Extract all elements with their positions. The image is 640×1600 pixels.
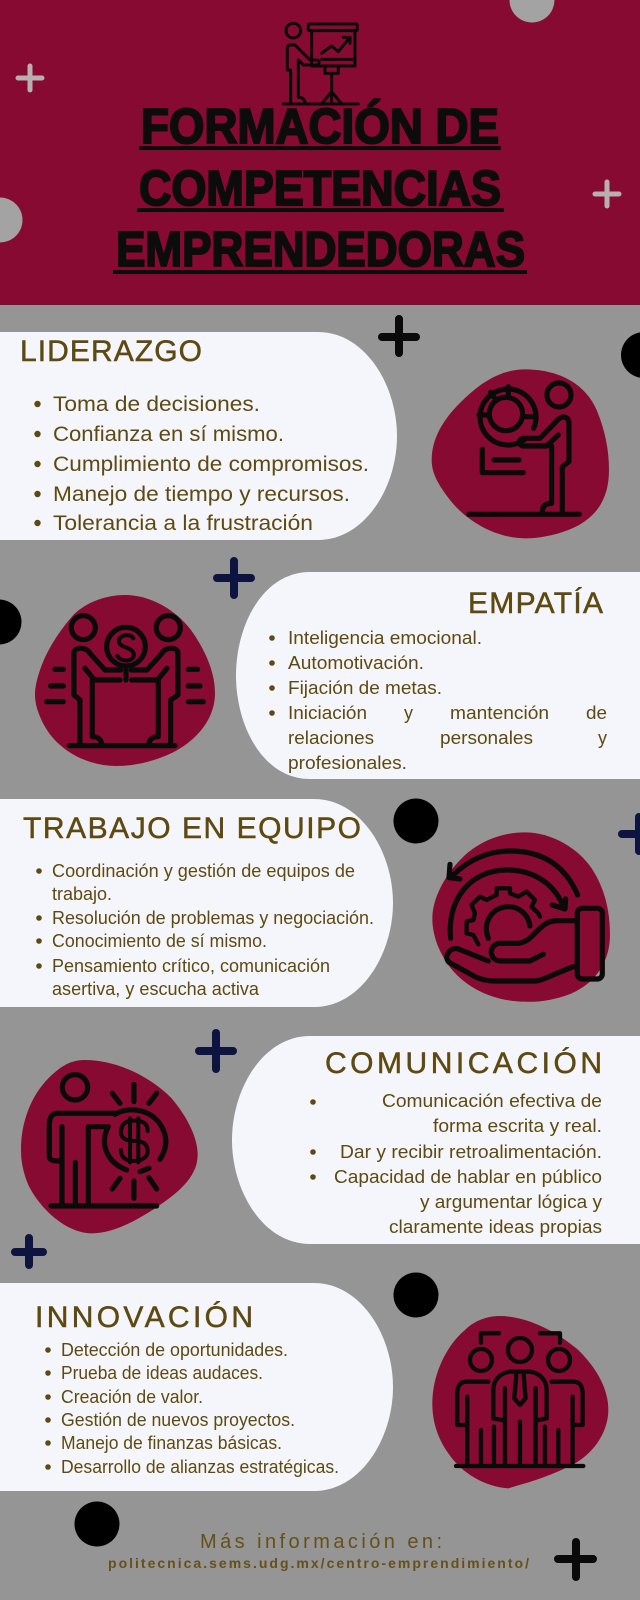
footer [108, 1531, 529, 1571]
list: comunicacion: y argumentar lógica y [420, 1192, 602, 1212]
list: empatia: Automotivación. [288, 653, 424, 673]
list: trabajo en equipo: Pensamiento crítico, comunicación [52, 956, 330, 976]
list: liderazgo: Tolerancia a la frustración [53, 512, 313, 535]
list: empatia: Iniciación [288, 703, 367, 723]
list: empatia: Fijación de metas. [288, 678, 442, 698]
list: trabajo en equipo: Coordinación y gestión de equipos de [52, 861, 355, 881]
heading: comunicacion: COMUNICACIÓN [325, 1047, 602, 1080]
list: comunicacion: claramente ideas propias [389, 1217, 602, 1237]
list: innovacion: Gestión de nuevos proyectos. [61, 1410, 295, 1430]
footer: more information: Más información en: [200, 1531, 442, 1553]
list: comunicacion: Capacidad de hablar en público [334, 1167, 602, 1187]
list: innovacion [45, 1340, 339, 1477]
list: empatia: relaciones [288, 728, 374, 748]
panel: trabajo en equipo [0, 799, 610, 1007]
list: trabajo en equipo: asertiva, y escucha activa [52, 979, 260, 999]
list: comunicacion: forma escrita y real. [433, 1116, 602, 1136]
list: innovacion: Prueba de ideas audaces. [61, 1363, 263, 1383]
footer: url: politecnica.sems.udg.mx/centro-emprendimiento/ [108, 1555, 529, 1571]
blob: comunicacion [21, 1060, 198, 1233]
list: liderazgo: Confianza en sí mismo. [53, 423, 284, 446]
blob: empatia [35, 595, 215, 766]
icon: two people with coin and box [47, 616, 203, 746]
title [113, 99, 527, 277]
panel: liderazgo [0, 332, 609, 540]
icon: person with dollar coin [49, 1075, 166, 1206]
list: trabajo en equipo: trabajo. [52, 884, 112, 904]
blob: innovacion [432, 1316, 608, 1488]
list: trabajo en equipo [36, 861, 374, 999]
list: liderazgo: Cumplimiento de compromisos. [53, 453, 369, 476]
panel: innovacion [0, 1283, 608, 1491]
list: empatia: y [404, 703, 413, 723]
heading: trabajo en equipo: TRABAJO EN EQUIPO [23, 812, 361, 845]
list: trabajo en equipo: Conocimiento de sí mismo. [52, 931, 267, 951]
blob: liderazgo [432, 369, 609, 538]
panel: empatia [35, 572, 640, 779]
title: COMPETENCIAS [139, 162, 501, 216]
list: innovacion: Desarrollo de alianzas estratégicas. [61, 1457, 339, 1477]
list: empatia: y [598, 728, 607, 748]
list: empatia: profesionales. [288, 753, 407, 773]
heading: innovacion: INNOVACIÓN [35, 1301, 253, 1334]
icon: hand holding gear with arrows [447, 851, 602, 981]
list: trabajo en equipo: Resolución de problemas y negociación. [52, 908, 374, 928]
heading: empatia: EMPATÍA [468, 587, 603, 620]
list: liderazgo: Toma de decisiones. [53, 393, 260, 416]
list: empatia: mantención [450, 703, 549, 723]
heading: liderazgo: LIDERAZGO [20, 335, 202, 368]
list: empatia: de [586, 703, 607, 723]
blob: trabajo en equipo [432, 832, 610, 1002]
list: liderazgo [34, 393, 369, 535]
panel: comunicacion [21, 1036, 640, 1244]
icon: team of three people [456, 1333, 583, 1466]
list: empatia [269, 628, 607, 773]
title: FORMACIÓN DE [141, 99, 499, 154]
icon: presenter with growth chart [283, 23, 358, 104]
list: innovacion: Manejo de finanzas básicas. [61, 1433, 282, 1453]
decorative shapes [0, 319, 640, 1577]
list: comunicacion [310, 1091, 602, 1237]
panel: header [0, 0, 640, 305]
title: EMPRENDEDORAS [116, 223, 525, 277]
list: innovacion: Creación de valor. [61, 1387, 203, 1407]
list: empatia: personales [440, 728, 533, 748]
list: liderazgo: Manejo de tiempo y recursos. [53, 483, 350, 506]
list: comunicacion: Comunicación efectiva de [382, 1091, 602, 1111]
list: innovacion: Detección de oportunidades. [61, 1340, 288, 1360]
icon: person with pie chart [469, 383, 579, 514]
list: empatia: Inteligencia emocional. [288, 628, 482, 648]
list: comunicacion: Dar y recibir retroalimentación. [340, 1142, 602, 1162]
